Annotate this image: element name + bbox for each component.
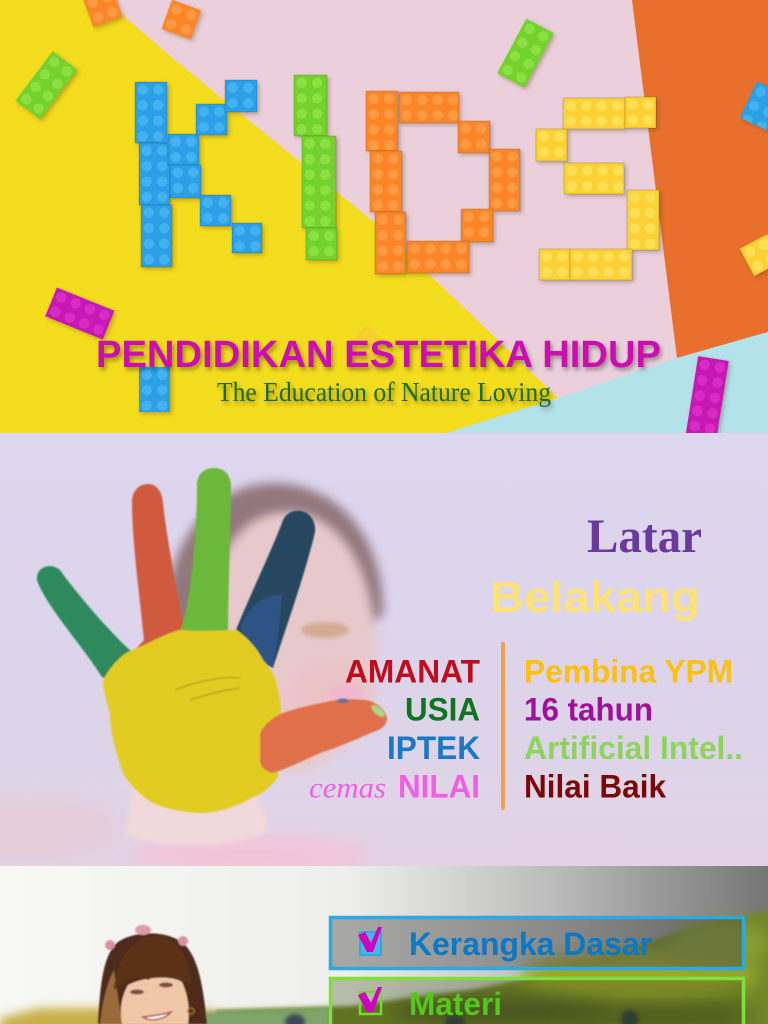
right column values: 16 tahun (524, 692, 653, 728)
right column values: Artificial Intel.. (524, 730, 743, 766)
left column labels (309, 654, 480, 804)
icon: checkbox green (358, 987, 382, 1014)
right column values: Pembina YPM (524, 654, 733, 690)
title: PENDIDIKAN ESTETIKA HIDUP (96, 334, 661, 376)
label: Kerangka Dasar: Kerangka Dasar (409, 926, 652, 962)
icon: painted hand (37, 468, 387, 813)
left column labels: AMANAT (345, 654, 480, 690)
divider (501, 642, 505, 810)
heading: Latar: Latar (587, 510, 702, 563)
box: Kerangka Dasar (330, 918, 744, 968)
letter D (366, 91, 520, 274)
left column labels: IPTEK (387, 730, 480, 766)
letter K (135, 80, 262, 267)
finger: pinky (37, 566, 132, 682)
blurred child background (0, 483, 383, 875)
panel: Latar Belakang (0, 433, 768, 875)
finger: middle (180, 468, 231, 632)
finger: ring (132, 484, 186, 652)
scattered lego bricks (15, 0, 768, 440)
lego word: KIDS (135, 75, 659, 280)
box: Materi (330, 978, 744, 1024)
letter I (294, 75, 337, 260)
letter S (536, 97, 659, 280)
finger: index (236, 511, 315, 668)
right column values (524, 654, 743, 804)
left column labels: USIA (405, 692, 480, 728)
palm (103, 630, 281, 813)
icon: checkbox blue (358, 927, 382, 955)
panel: outline menu with girl (0, 866, 768, 1024)
left column labels: cemas (309, 772, 386, 804)
left column labels: NILAI (398, 768, 480, 804)
faint yellow brick behind title (347, 325, 388, 370)
subtitle: The Education of Nature Loving (217, 377, 551, 407)
heading: Belakang: Belakang (490, 573, 700, 622)
finger: thumb (260, 699, 387, 773)
panel: KIDS lego banner (0, 0, 768, 440)
label: Materi: Materi (409, 986, 502, 1022)
girl portrait (98, 925, 207, 1024)
blurred tree line (0, 905, 768, 1024)
right column values: Nilai Baik (524, 768, 666, 804)
